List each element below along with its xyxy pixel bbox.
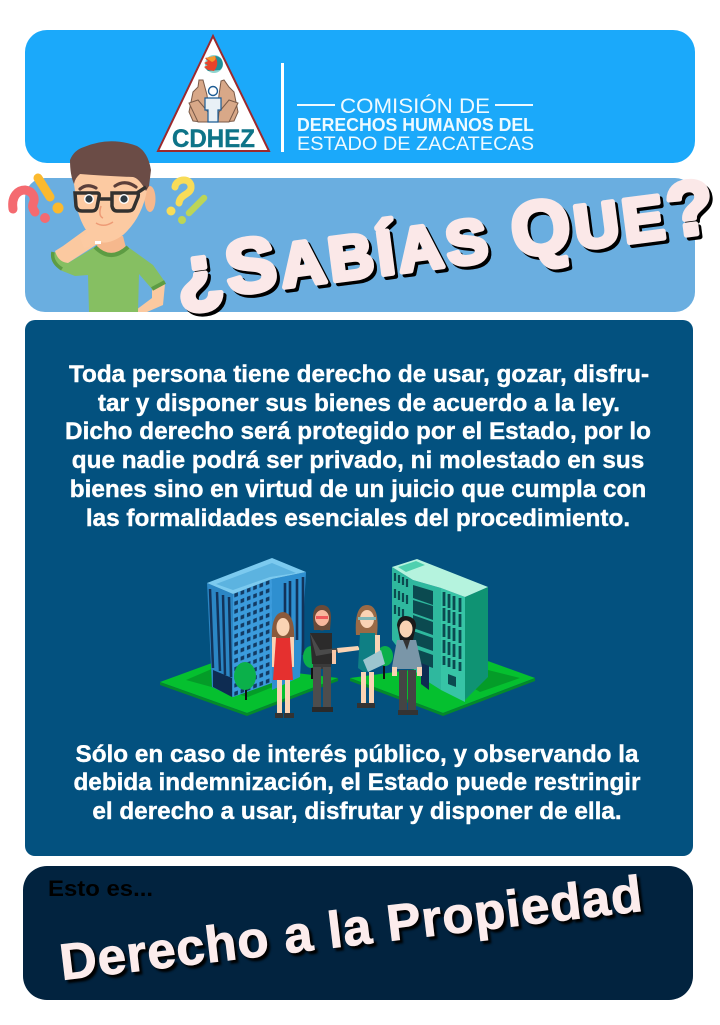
icon: thinking man <box>13 141 204 312</box>
text block: commission name: ESTADO DE ZACATECAS <box>297 133 534 155</box>
person: man in blue sweater <box>392 616 422 715</box>
ear <box>144 186 156 212</box>
text block: commission name: COMISIÓN DE <box>340 93 490 118</box>
logo: CDHEZ triangle <box>158 36 269 153</box>
right forearm <box>133 284 165 312</box>
text block: public interest paragraph <box>73 741 641 825</box>
text block: property right paragraph: Toda persona tiene derecho de usar, gozar, disfru- <box>69 361 649 388</box>
neck <box>97 236 126 255</box>
right lawn <box>350 660 535 713</box>
hand at chin <box>80 228 100 248</box>
icon: yellow question mark <box>166 180 191 216</box>
panel: sabías que banner <box>25 178 695 312</box>
left lawn <box>160 663 338 713</box>
illustration: buildings and people <box>160 558 535 718</box>
person: woman in red dress <box>272 612 294 718</box>
text block: property right paragraph: las formalidades esenciales del procedimiento. <box>86 505 630 532</box>
icon: red question mark <box>13 190 50 223</box>
raised arm <box>55 229 99 263</box>
divider: header logo separator <box>281 63 284 152</box>
title: derecho a la propiedad: Derecho a la Propiedad <box>57 865 646 991</box>
text block: property right paragraph: tar y disponer sus bienes de acuerdo a la ley. <box>98 390 620 417</box>
shirt <box>52 247 165 312</box>
text block: public interest paragraph: debida indemnización, el Estado puede restringir <box>73 769 641 796</box>
text block: commission name: DERECHOS HUMANOS DEL <box>297 114 534 135</box>
text block: commission name <box>297 93 534 155</box>
icon: hands protecting person <box>189 80 238 122</box>
eyebrows <box>80 183 136 189</box>
icon: yellow exclamation mark <box>38 178 64 214</box>
glasses <box>75 187 146 211</box>
hair <box>70 141 151 191</box>
left building <box>207 558 306 697</box>
label: esto es: Esto es... <box>48 876 153 901</box>
right building <box>392 559 488 702</box>
text block: property right paragraph: Dicho derecho será protegido por el Estado, por lo <box>65 418 651 445</box>
icon: sun emblem <box>204 55 223 73</box>
nose and mouth <box>96 206 113 225</box>
text block: property right paragraph: que nadie podrá ser privado, ni molestado en sus <box>72 447 644 474</box>
text block: property right paragraph <box>65 361 651 532</box>
left tree <box>234 662 256 700</box>
text block: public interest paragraph: el derecho a usar, disfrutar y disponer de ella. <box>92 798 622 825</box>
person: bearded man <box>310 605 338 712</box>
text block: property right paragraph: bienes sino en virtud de un juicio que cumpla con <box>70 476 646 503</box>
panel: header banner <box>25 30 695 163</box>
panel: footer banner <box>23 866 693 1000</box>
eyes <box>84 194 129 204</box>
face <box>72 170 148 243</box>
logo wordmark: CDHEZ: CDHEZ <box>172 125 255 153</box>
icon: green exclamation mark <box>178 198 204 224</box>
center trees <box>303 646 393 679</box>
panel: main text panel <box>25 320 693 856</box>
text block: public interest paragraph: Sólo en caso de interés público, y observando la <box>75 741 639 768</box>
person: woman in teal dress <box>337 605 385 708</box>
title: ¿Sabías que?: ¿SABÍAS QUE? <box>170 163 720 318</box>
